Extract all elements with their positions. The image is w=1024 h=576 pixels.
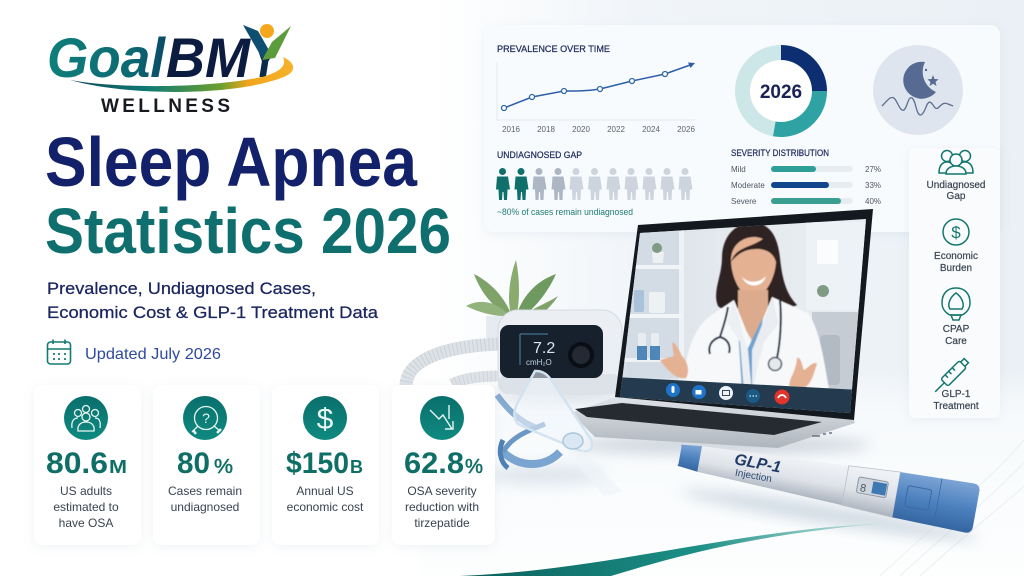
title: Statistics 2026: [45, 195, 451, 267]
icon: people: [64, 396, 108, 440]
panel: topic sidebar: [909, 148, 1000, 418]
GLP-1 injection pen: Injection: [734, 468, 773, 485]
description: [287, 484, 364, 514]
icon: dollar circle: $: [951, 223, 961, 242]
card: 62.8% reduction: [392, 385, 495, 545]
subtitle: Prevalence, Undiagnosed Cases,: [47, 279, 316, 298]
description: have OSA: [59, 516, 113, 530]
pictogram: undiagnosed gap: [496, 150, 692, 218]
call toolbar: [620, 377, 852, 413]
value: 62.8%: 62.8: [404, 447, 464, 480]
laptop base: [571, 397, 855, 448]
icon: CPAP mask: [942, 288, 970, 320]
logo: GoalBMY Wellness: BM: [166, 26, 251, 89]
logo: GoalBMY Wellness: [47, 24, 293, 117]
description: Cases remain: [168, 484, 242, 498]
label: undiagnosed gap: Gap: [947, 191, 966, 202]
icon: dollar circle: [943, 219, 969, 245]
bar chart: severity distribution: Moderate: [731, 181, 765, 190]
label: economic burden: Economic: [934, 251, 978, 262]
updated date: Updated July 2026: [85, 346, 221, 363]
label: economic burden: [934, 251, 978, 274]
line chart: prevalence over time: 2022: [607, 125, 625, 134]
line chart: prevalence over time: [497, 44, 695, 134]
label: undiagnosed gap: Undiagnosed: [927, 180, 985, 191]
subtitle: [47, 279, 379, 322]
card: 80.6M adults: [34, 385, 141, 545]
donut chart: 2026: 2026: [760, 82, 802, 103]
description: undiagnosed: [171, 500, 239, 514]
icon: magnifier question: [183, 396, 227, 440]
card: 80% undiagnosed: %: [214, 456, 233, 478]
subtitle: Economic Cost & GLP-1 Treatment Data: [47, 303, 379, 322]
GLP-1 injection pen: 8: [859, 482, 867, 495]
card: 80% undiagnosed: [153, 385, 260, 545]
bar chart: severity distribution: Mild: [731, 165, 746, 174]
GLP-1 injection pen: [675, 431, 981, 547]
icon: undiagnosed gap people: [939, 150, 973, 174]
line chart: prevalence over time: 2020: [572, 125, 590, 134]
CPAP machine: 7.2: [533, 340, 555, 357]
description: economic cost: [287, 500, 364, 514]
description: [53, 484, 119, 530]
donut chart: 2026: [735, 45, 827, 137]
CPAP tubing: [406, 344, 500, 386]
laptop lid: [615, 209, 873, 420]
icon: magnifier question: ?: [202, 410, 210, 426]
label: CPAP care: [943, 324, 970, 347]
card: $150B cost: B: [350, 457, 363, 477]
laptop: [570, 209, 880, 454]
description: reduction with: [405, 500, 479, 514]
pictogram: undiagnosed gap: UNDIAGNOSED GAP: [497, 150, 582, 161]
card: 62.8% reduction: %: [465, 456, 483, 478]
icon: calendar: [48, 340, 70, 364]
GLP-1 injection pen: GLP-1: [733, 451, 782, 476]
CPAP machine: cmH₂O: [526, 358, 552, 367]
icon: dollar: [303, 396, 347, 440]
description: US adults: [60, 484, 112, 498]
description: [405, 484, 479, 530]
bar chart: severity distribution: SEVERITY DISTRIBUTION: [731, 148, 829, 159]
logo: GoalBMY Wellness: Goal: [47, 26, 166, 89]
keyboard: [575, 403, 822, 435]
label: CPAP care: Care: [945, 336, 967, 347]
panel: right dashboard: [484, 25, 1000, 232]
bar chart: severity distribution: [731, 148, 881, 206]
card: 80.6M adults: M: [109, 457, 127, 477]
icon: injection pen: [932, 357, 970, 395]
CPAP mask: [485, 371, 623, 496]
description: OSA severity: [407, 484, 477, 498]
doctor: [660, 223, 830, 400]
bar chart: severity distribution: 27%: [865, 165, 881, 174]
line chart: prevalence over time: 2018: [537, 125, 555, 134]
line chart: prevalence over time: 2016: [502, 125, 520, 134]
logo: GoalBMY Wellness: Y: [250, 26, 284, 89]
bar chart: severity distribution: 40%: [865, 197, 881, 206]
CPAP machine: [490, 310, 630, 402]
laptop ports: [812, 433, 832, 436]
label: economic burden: Burden: [940, 263, 972, 274]
title: Sleep Apnea: [45, 123, 418, 201]
line chart: prevalence over time: PREVALENCE OVER TIME: [497, 44, 610, 55]
icon: dollar: $: [317, 403, 334, 436]
icon: declining arrow: [420, 396, 464, 440]
card: $150B cost: [272, 385, 379, 545]
bar chart: severity distribution: 33%: [865, 181, 881, 190]
icon: moon and sleep wave: [873, 45, 963, 135]
description: estimated to: [53, 500, 119, 514]
line chart: prevalence over time: 2024: [642, 125, 660, 134]
bottom swoosh: [460, 523, 892, 576]
stat cards: [34, 385, 495, 545]
description: [168, 484, 242, 514]
description: tirzepatide: [414, 516, 470, 530]
label: GLP-1 treatment: Treatment: [933, 401, 979, 412]
bar chart: severity distribution: Severe: [731, 197, 757, 206]
value: 80%: 80: [177, 447, 210, 480]
title: [45, 123, 451, 267]
label: CPAP care: CPAP: [943, 324, 970, 335]
line chart: prevalence over time: 2026: [677, 125, 695, 134]
label: undiagnosed gap: [927, 180, 985, 202]
label: GLP-1 treatment: [933, 389, 979, 412]
value: $150B: $150: [286, 447, 349, 480]
plant: [466, 260, 558, 338]
video call screen: [620, 219, 866, 413]
description: Annual US: [296, 484, 354, 498]
pictogram: undiagnosed gap: ~80% of cases remain undiagnosed: [497, 207, 633, 218]
label: GLP-1 treatment: GLP-1: [942, 389, 971, 400]
value: 80.6M: 80.6: [46, 447, 108, 480]
logo: GoalBMY Wellness: WELLNESS: [101, 96, 232, 117]
